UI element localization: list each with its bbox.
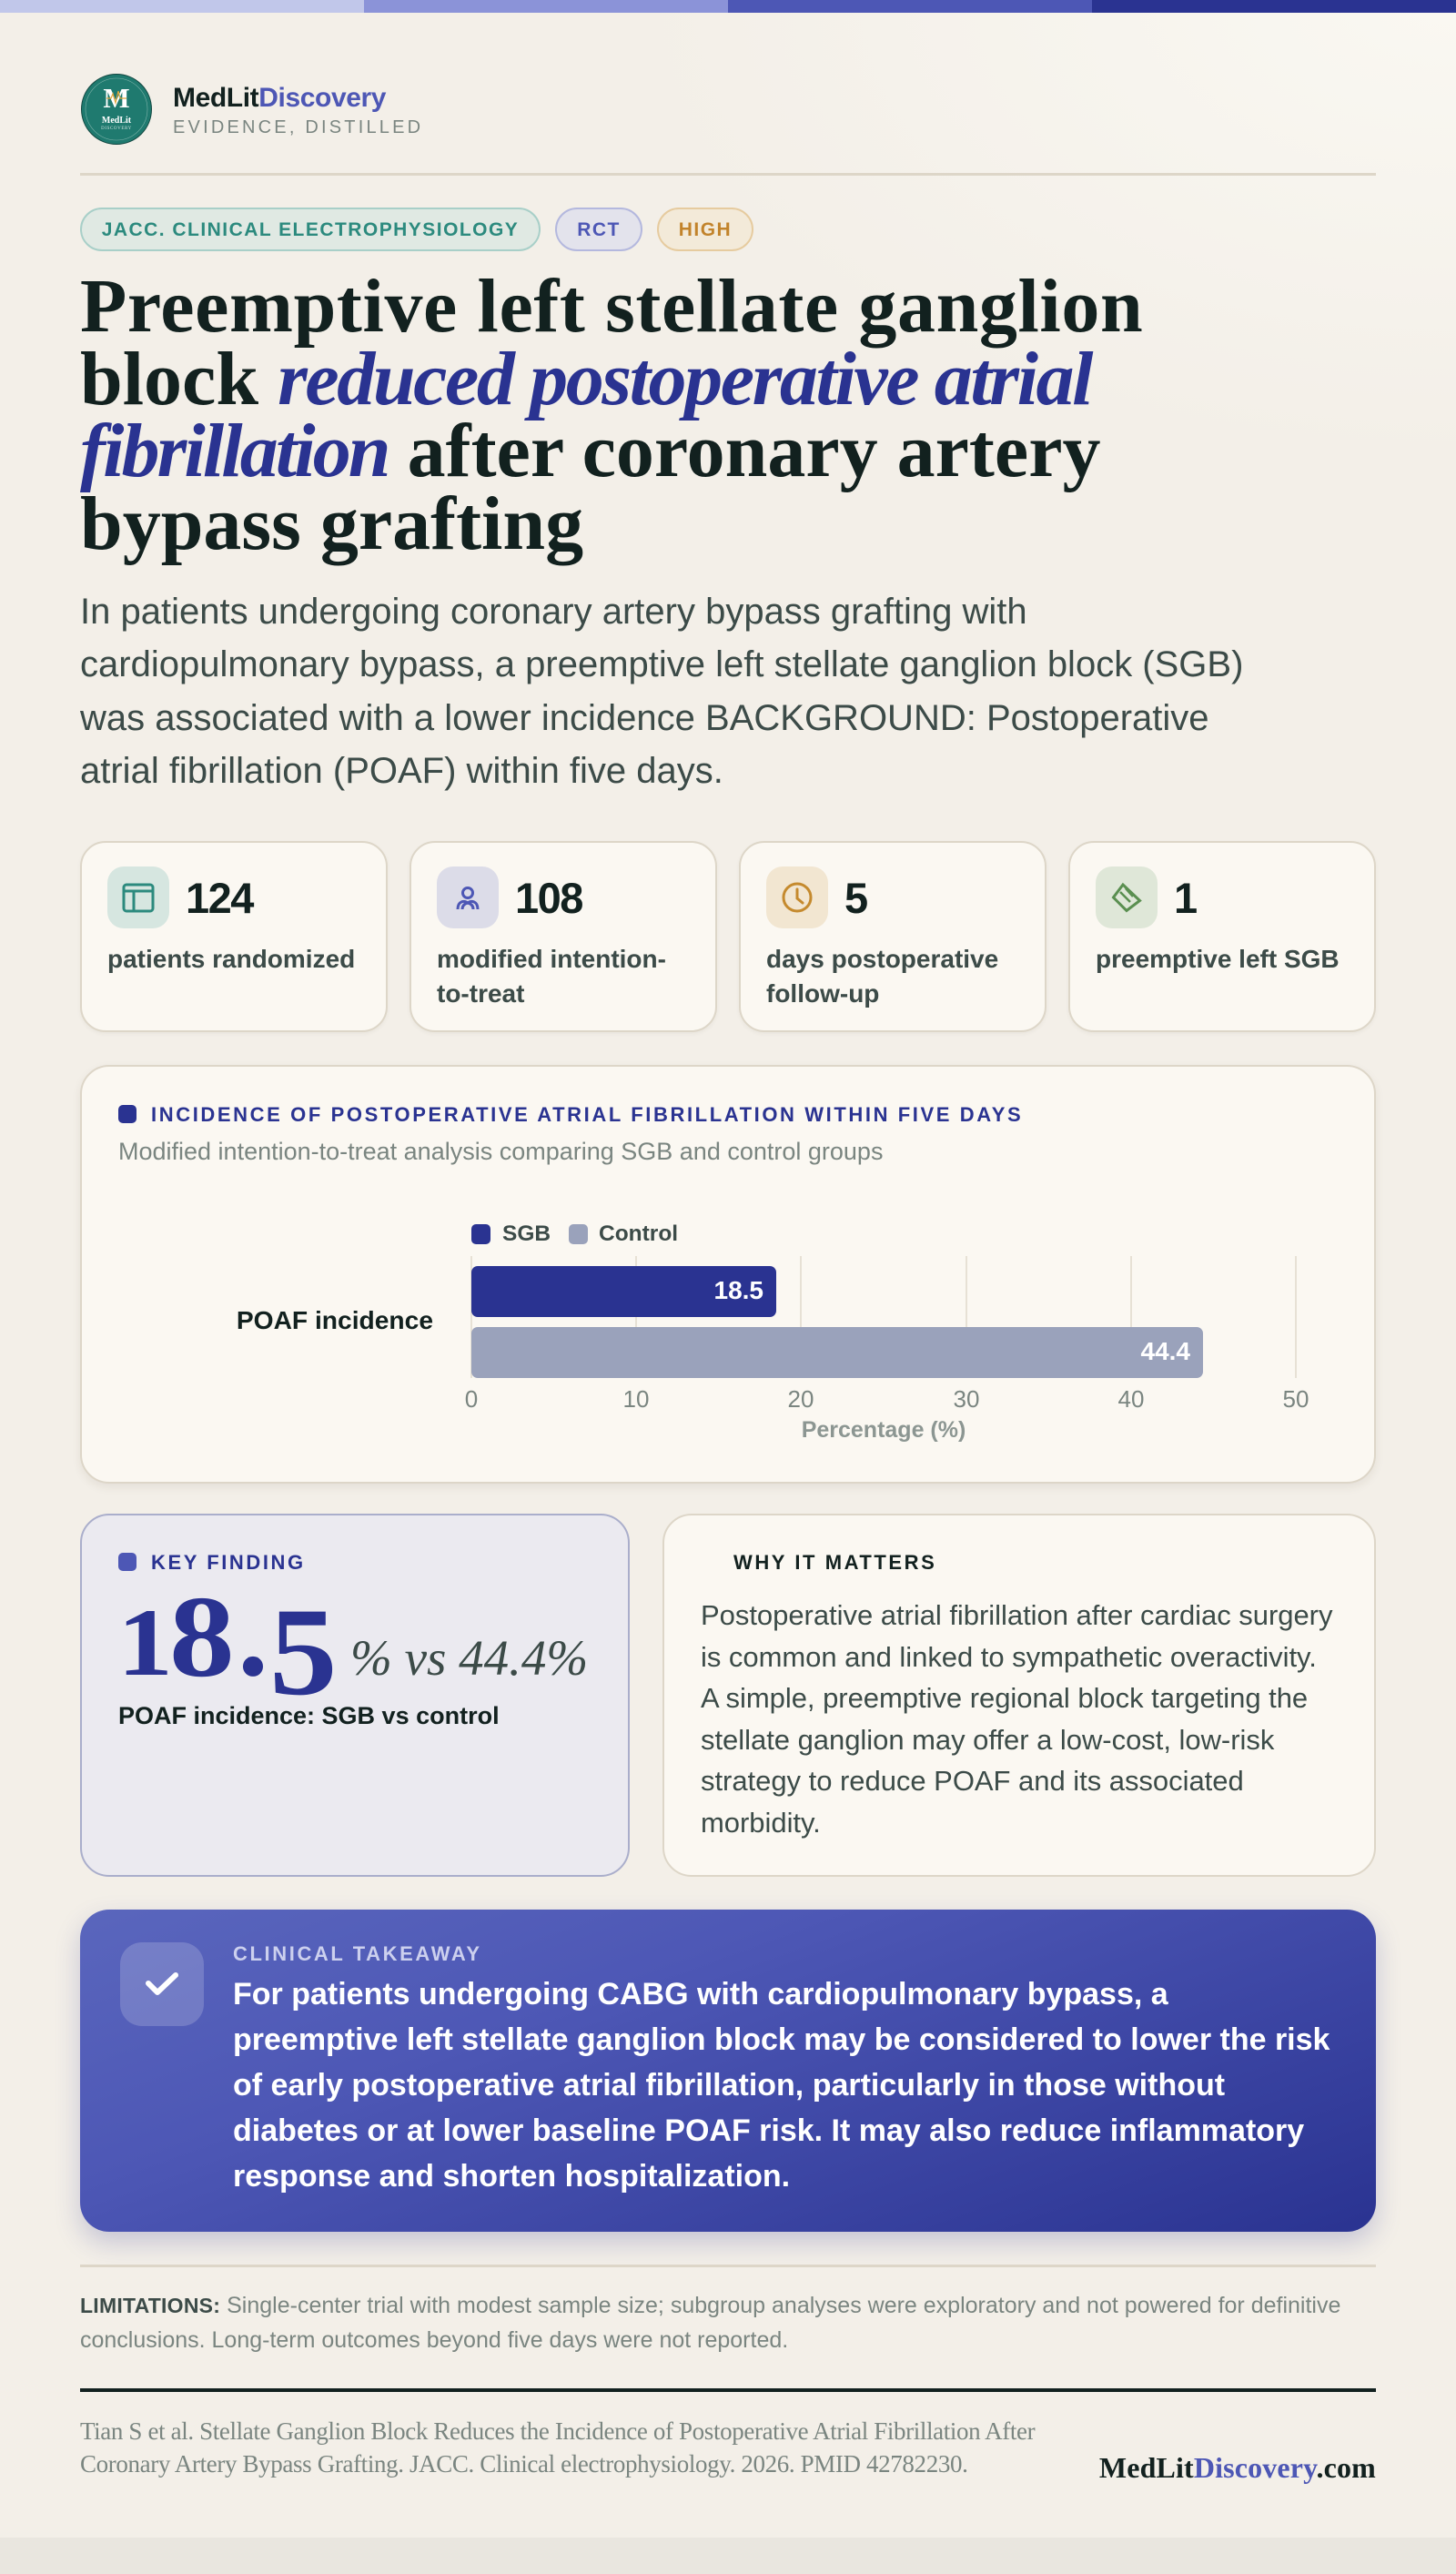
stat card: modified intention-to-treat: to-treat bbox=[437, 979, 524, 1008]
x axis title: Percentage (%) bbox=[802, 1417, 966, 1443]
panel: chart bbox=[80, 1065, 1376, 1484]
panel: key finding bbox=[80, 1514, 630, 1877]
heading marker bbox=[118, 1105, 136, 1123]
body: A simple, preemptive regional block targeting the bbox=[701, 1682, 1308, 1714]
big number: 5 bbox=[269, 1582, 338, 1721]
chart subtitle: Modified intention-to-treat analysis comparing SGB and control groups bbox=[118, 1138, 883, 1165]
x axis ticks: 40 bbox=[1118, 1385, 1144, 1413]
subtitle bbox=[80, 592, 1243, 791]
bar: SGB: 18.5 bbox=[713, 1276, 763, 1304]
takeaway text: response and shorten hospitalization. bbox=[233, 2159, 790, 2194]
takeaway text: For patients undergoing CABG with cardiopulmonary bypass, a bbox=[233, 1977, 1168, 2012]
label: CLINICAL TAKEAWAY bbox=[233, 1942, 482, 1965]
body: strategy to reduce POAF and its associated bbox=[701, 1765, 1244, 1797]
stat card: days follow-up bbox=[739, 841, 1046, 1032]
body: Postoperative atrial fibrillation after cardiac surgery bbox=[701, 1599, 1332, 1631]
stat card: preemptive left SGB bbox=[1068, 841, 1376, 1032]
body: morbidity. bbox=[701, 1806, 821, 1839]
tag: journal: JACC. CLINICAL ELECTROPHYSIOLOGY bbox=[102, 219, 519, 240]
takeaway text: diabetes or at lower baseline POAF risk. It may also reduce inflammatory bbox=[233, 2113, 1304, 2148]
x axis ticks: 50 bbox=[1283, 1385, 1309, 1413]
takeaway text: of early postoperative atrial fibrillation, particularly in those without bbox=[233, 2068, 1225, 2103]
top colour bar bbox=[0, 0, 1456, 13]
logo bbox=[81, 74, 152, 145]
big number: 8 bbox=[169, 1572, 235, 1701]
logo: M bbox=[103, 82, 130, 114]
stat card: patients randomized bbox=[80, 841, 388, 1032]
panel: why it matters bbox=[662, 1514, 1376, 1877]
legend bbox=[471, 1221, 678, 1246]
bar: control bbox=[471, 1327, 1203, 1378]
big number: . bbox=[238, 1566, 268, 1702]
title: block reduced postoperative atrial bbox=[80, 337, 1091, 421]
label: KEY FINDING bbox=[151, 1551, 306, 1574]
logo: MedLit bbox=[102, 116, 132, 126]
x axis ticks: 10 bbox=[623, 1385, 649, 1413]
caption: POAF incidence: SGB vs control bbox=[118, 1702, 500, 1729]
x axis ticks bbox=[465, 1385, 1309, 1413]
limitations: LIMITATIONS: Single-center trial with modest sample size; subgroup analyses were exploratory and not powered for definitive bbox=[80, 2293, 1340, 2318]
label: WHY IT MATTERS bbox=[733, 1551, 936, 1574]
citation: Coronary Artery Bypass Grafting. JACC. Clinical electrophysiology. 2026. PMID 42782230. bbox=[80, 2450, 967, 2478]
stat card: days follow-up: days postoperative bbox=[766, 945, 998, 973]
limitations: conclusions. Long-term outcomes beyond five days were not reported. bbox=[80, 2327, 788, 2353]
icon: person bbox=[437, 866, 499, 928]
icon: check bbox=[120, 1942, 204, 2026]
stat card: preemptive left SGB: preemptive left SGB bbox=[1096, 945, 1340, 973]
limitations bbox=[80, 2293, 1340, 2353]
takeaway text bbox=[233, 1977, 1330, 2194]
big number: 1 bbox=[117, 1589, 173, 1696]
subtitle: cardiopulmonary bypass, a preemptive left stellate ganglion block (SGB) bbox=[80, 644, 1243, 684]
tag: evidence level bbox=[657, 208, 753, 251]
icon: syringe bbox=[1096, 866, 1158, 928]
panel: clinical takeaway bbox=[80, 1910, 1376, 2232]
divider bbox=[80, 2265, 1376, 2267]
takeaway text: preemptive left stellate ganglion block may be considered to lower the risk bbox=[233, 2022, 1330, 2057]
stat card: patients randomized: 124 bbox=[186, 874, 253, 922]
stat card: days follow-up: 5 bbox=[844, 874, 867, 922]
title bbox=[80, 264, 1143, 566]
subtitle: In patients undergoing coronary artery bypass grafting with bbox=[80, 592, 1027, 632]
footer rule bbox=[80, 2388, 1376, 2392]
stat card: patients randomized: patients randomized bbox=[107, 945, 355, 973]
logo: DISCOVERY bbox=[101, 127, 132, 131]
comparison: % vs 44.4% bbox=[350, 1630, 588, 1686]
tag: journal bbox=[80, 208, 541, 251]
subtitle: was associated with a lower incidence BACKGROUND: Postoperative bbox=[80, 698, 1209, 738]
x axis ticks: 20 bbox=[788, 1385, 814, 1413]
marker bbox=[118, 1553, 136, 1571]
brand wordmark: MedLitDiscovery bbox=[173, 83, 386, 113]
legend: SGB bbox=[502, 1221, 551, 1246]
stat card: modified intention-to-treat bbox=[410, 841, 717, 1032]
title: fibrillation after coronary artery bbox=[80, 409, 1100, 493]
stat card: modified intention-to-treat: modified intention- bbox=[437, 945, 666, 973]
stat card: preemptive left SGB: 1 bbox=[1174, 874, 1197, 922]
brand tagline: EVIDENCE, DISTILLED bbox=[173, 117, 423, 137]
bar chart bbox=[237, 1256, 1309, 1443]
bar: SGB bbox=[471, 1266, 776, 1317]
citation: Tian S et al. Stellate Ganglion Block Reduces the Incidence of Postoperative Atrial Fibrillation After bbox=[80, 2417, 1035, 2445]
category label: POAF incidence bbox=[237, 1305, 433, 1334]
big number bbox=[117, 1566, 338, 1721]
footer brand: MedLitDiscovery.com bbox=[1099, 2451, 1376, 2484]
body: is common and linked to sympathetic overactivity. bbox=[701, 1640, 1317, 1673]
icon: clock bbox=[766, 866, 828, 928]
legend: Control bbox=[599, 1221, 678, 1246]
header rule bbox=[80, 173, 1376, 176]
tag: evidence level: HIGH bbox=[679, 219, 732, 240]
chart heading: INCIDENCE OF POSTOPERATIVE ATRIAL FIBRILLATION WITHIN FIVE DAYS bbox=[151, 1103, 1023, 1126]
x axis ticks: 30 bbox=[954, 1385, 979, 1413]
title: Preemptive left stellate ganglion bbox=[80, 264, 1143, 349]
tag: study design bbox=[555, 208, 642, 251]
body: stellate ganglion may offer a low-cost, low-risk bbox=[701, 1724, 1274, 1755]
tag: study design: RCT bbox=[577, 219, 621, 240]
body bbox=[701, 1599, 1332, 1839]
icon: table bbox=[107, 866, 169, 928]
stat card: modified intention-to-treat: 108 bbox=[515, 874, 582, 922]
x axis ticks: 0 bbox=[465, 1385, 478, 1413]
subtitle: atrial fibrillation (POAF) within five days. bbox=[80, 751, 723, 791]
title: bypass grafting bbox=[80, 481, 583, 566]
stat card: days follow-up: follow-up bbox=[766, 979, 879, 1008]
bar: control: 44.4 bbox=[1141, 1337, 1190, 1365]
citation bbox=[80, 2417, 1036, 2478]
